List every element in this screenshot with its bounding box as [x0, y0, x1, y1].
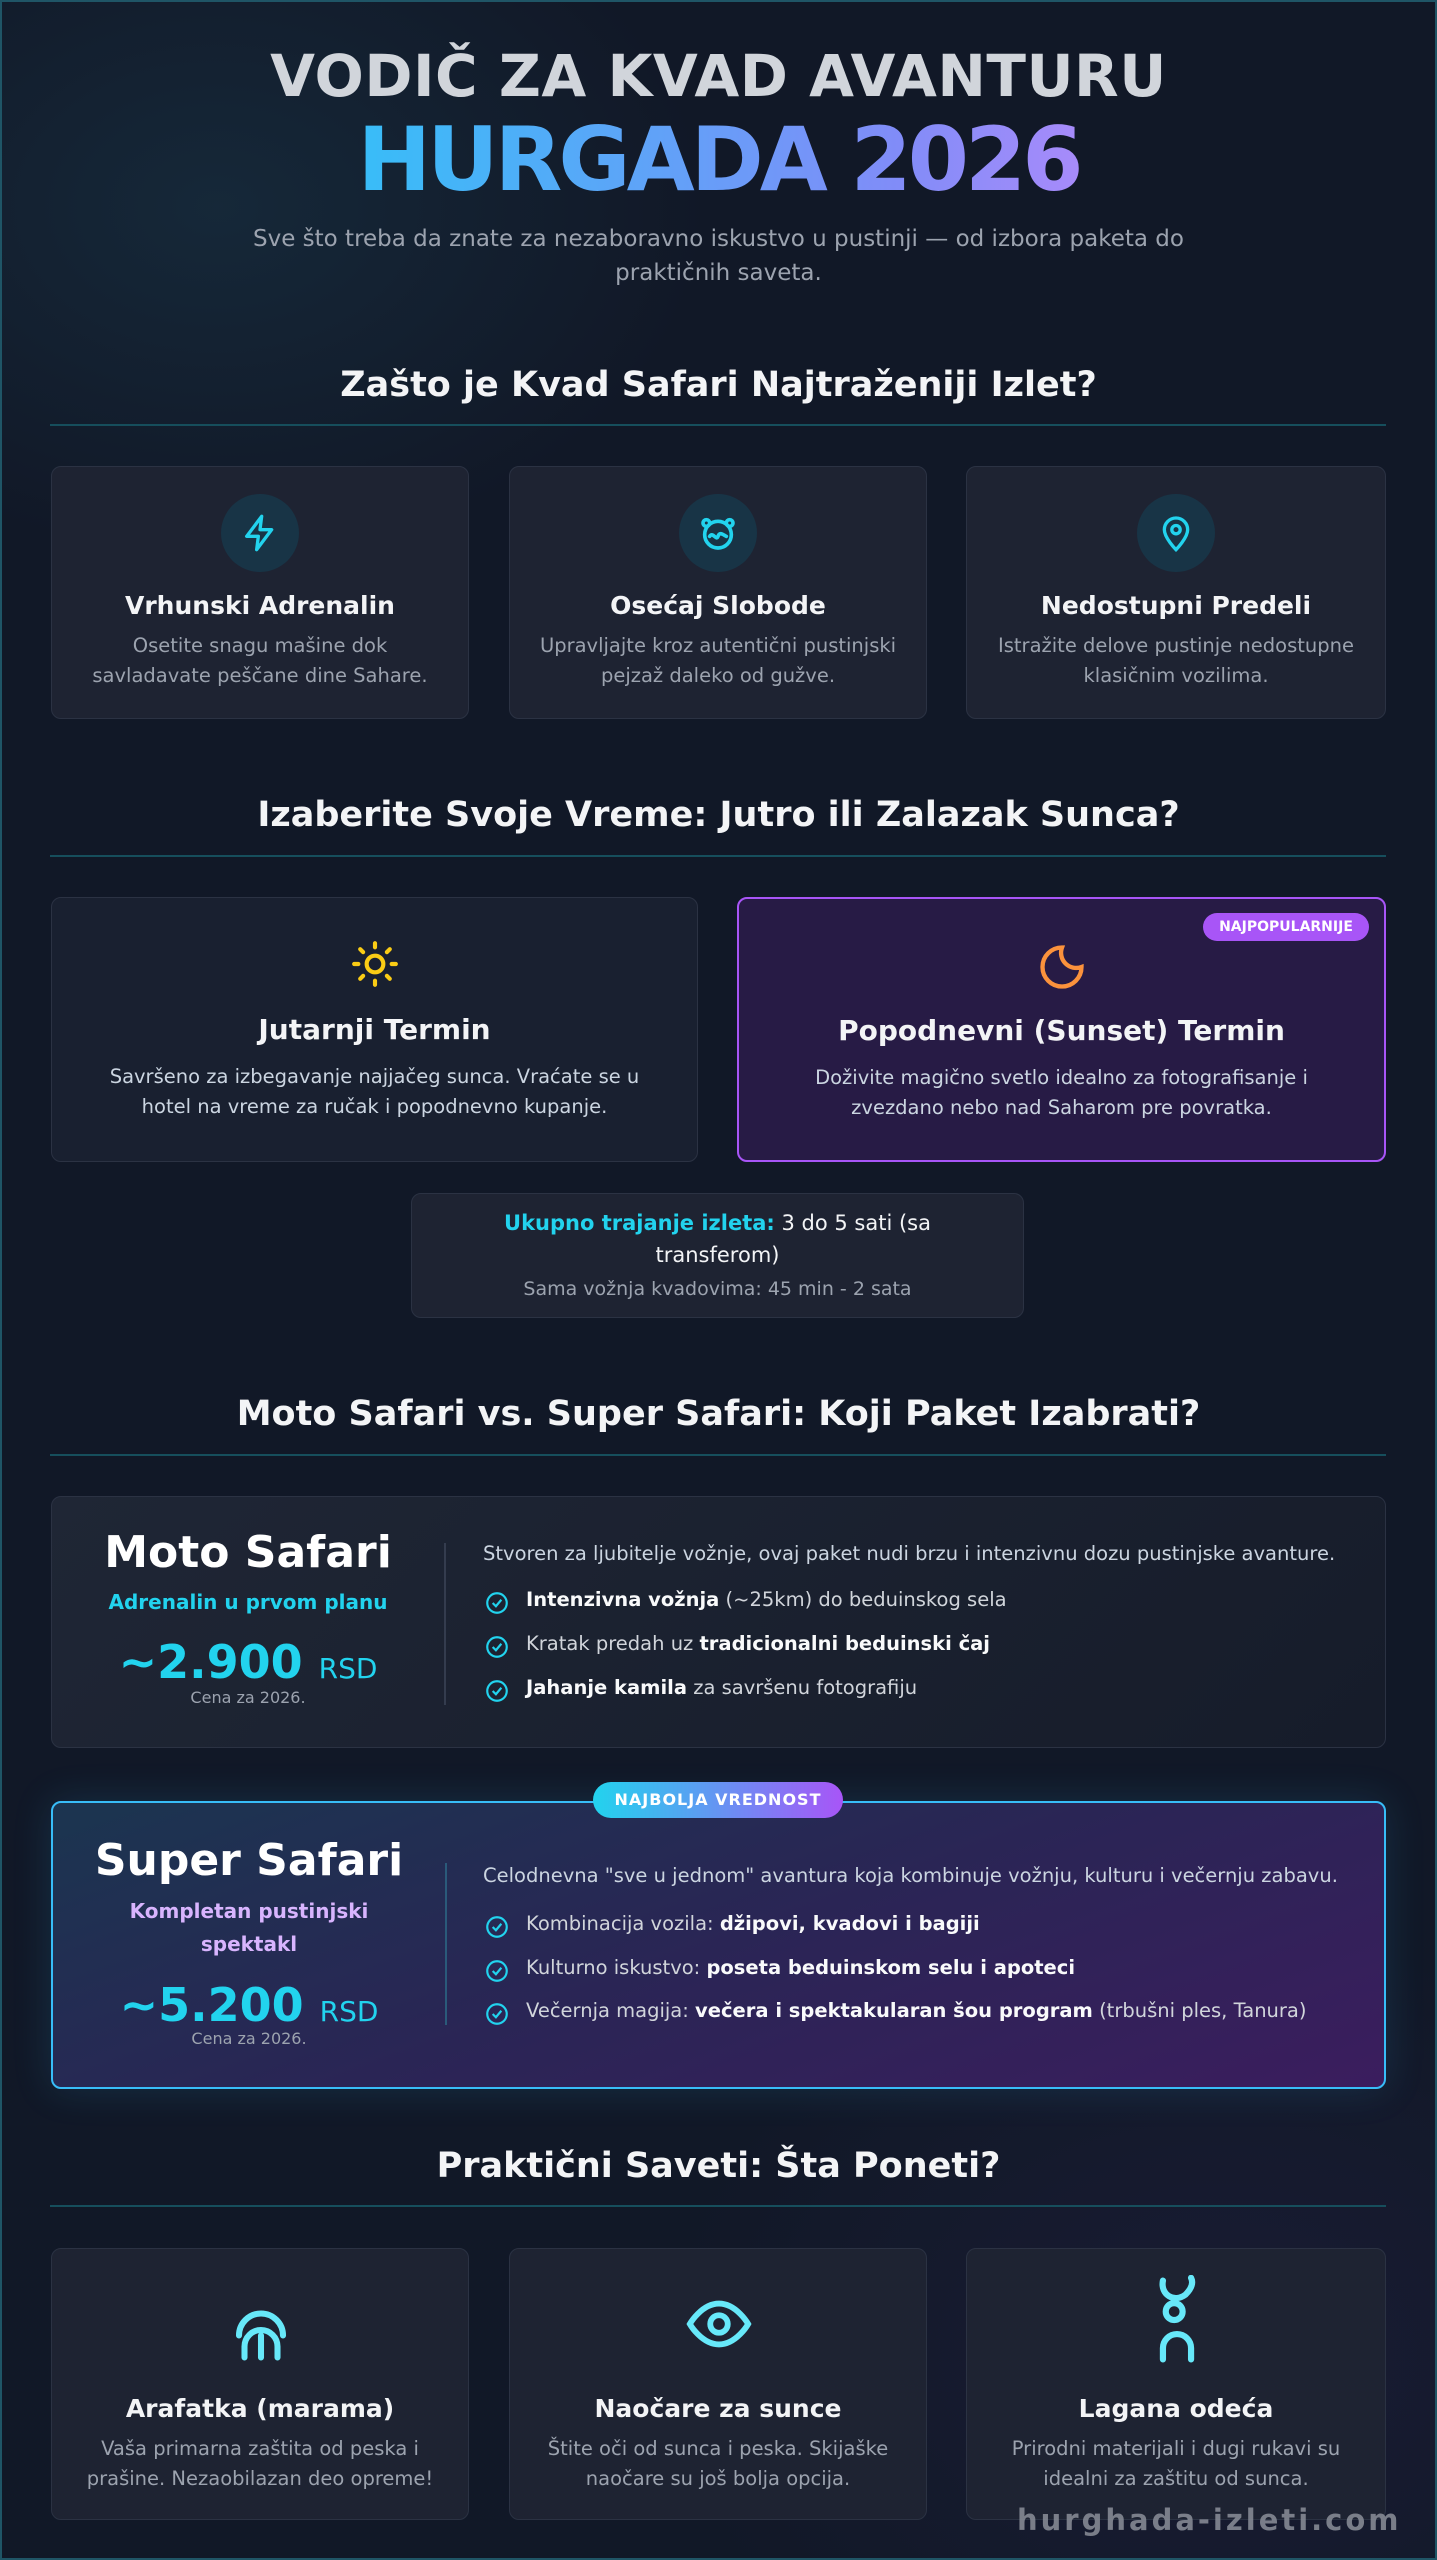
- icon: lightning: [221, 494, 299, 572]
- list: super features: Kulturno iskustvo: poseta beduinskom selu i apoteci: [526, 1956, 1075, 1979]
- panel: naocare: [509, 2248, 927, 2520]
- panel: super safari: Cena za 2026.: [191, 2029, 307, 2048]
- callout: duration: [411, 1193, 1024, 1318]
- list: moto features: [486, 1588, 1007, 1702]
- badge: najpopularnije: NAJPOPULARNIJE: [1219, 919, 1353, 935]
- text: moto description: Stvoren za ljubitelje vožnje, ovaj paket nudi brzu i intenzivnu dozu pustinjske avanture.: [483, 1542, 1335, 1565]
- panel: sloboda: Osećaj Slobode: [610, 591, 826, 620]
- badge: najbolja vrednost: [593, 1782, 843, 1818]
- list: moto features: Kratak predah uz tradicionalni beduinski čaj: [526, 1632, 990, 1655]
- panel: adrenalin: [51, 466, 469, 719]
- panel: predeli: [966, 466, 1386, 719]
- panel: sunset: Popodnevni (Sunset) Termin: [838, 1014, 1285, 1047]
- callout: duration: Sama vožnja kvadovima: 45 min - 2 sata: [523, 1278, 912, 1300]
- price: ~5.200 RSD: [120, 1978, 378, 2032]
- icon: eye: [686, 2300, 752, 2348]
- heading: packages: Moto Safari vs. Super Safari: Koji Paket Izabrati?: [237, 1394, 1200, 1434]
- panel: odeca: Lagana odeća: [1079, 2394, 1273, 2423]
- panel: moto safari: Adrenalin u prvom planu: [108, 1590, 387, 1614]
- panel: arafatka: [51, 2248, 469, 2520]
- price: ~2.900 RSD: [119, 1635, 377, 1689]
- panel: moto safari: Cena za 2026.: [190, 1688, 306, 1707]
- panel: moto safari: [51, 1496, 1386, 1748]
- panel: arafatka: Arafatka (marama): [126, 2394, 394, 2423]
- panel: predeli: Nedostupni Predeli: [1041, 591, 1311, 620]
- panel: sunset: Doživite magično svetlo idealno za fotografisanje i zvezdano nebo nad Saharom pre povratka.: [815, 1066, 1308, 1119]
- watermark: hurghada-izleti.com: [1017, 2503, 1402, 2537]
- list: super features: Kombinacija vozila: džipovi, kvadovi i bagiji: [526, 1912, 980, 1935]
- list: moto features: Jahanje kamila za savršenu fotografiju: [526, 1676, 917, 1699]
- panel: morning: [51, 897, 698, 1162]
- icon: pin: [1137, 494, 1215, 572]
- panel: morning: Jutarnji Termin: [258, 1013, 491, 1046]
- panel: super safari: [51, 1801, 1386, 2089]
- panel: naocare: Naočare za sunce: [594, 2394, 842, 2423]
- badge: najpopularnije: [1203, 913, 1369, 941]
- panel: moto safari: Moto Safari: [104, 1527, 392, 1578]
- list: moto features: Intenzivna vožnja (~25km) do beduinskog sela: [526, 1588, 1007, 1611]
- panel: odeca: [966, 2248, 1386, 2520]
- badge: najbolja vrednost: NAJBOLJA VREDNOST: [615, 1790, 821, 1809]
- heading: why: Zašto je Kvad Safari Najtraženiji Izlet?: [340, 365, 1097, 405]
- callout: duration: Ukupno trajanje izleta: 3 do 5 sati (sa transferom): [504, 1211, 931, 1267]
- icon: scarf: [236, 2310, 286, 2360]
- icon: clothing: [1159, 2275, 1196, 2362]
- panel: morning: Savršeno za izbegavanje najjačeg sunca. Vraćate se u hotel na vreme za ručak i popodnevno kupanje.: [110, 1065, 639, 1118]
- panel: naocare: Štite oči od sunca i peska. Skijaške naočare su još bolja opcija.: [548, 2437, 888, 2490]
- panel: super safari: Kompletan pustinjski spektakl: [130, 1899, 368, 1956]
- panel: sloboda: Upravljajte kroz autentični pustinjski pejzaž daleko od gužve.: [540, 634, 896, 687]
- panel: sloboda: [509, 466, 927, 719]
- panel: predeli: Istražite delove pustinje nedostupne klasičnim vozilima.: [998, 634, 1354, 687]
- text: super description: Celodnevna "sve u jednom" avantura koja kombinuje vožnju, kulturu i večernju zabavu.: [483, 1864, 1338, 1887]
- icon: moon: [1040, 945, 1084, 989]
- subtitle: Sve što treba da znate za nezaboravno iskustvo u pustinji — od izbora paketa do praktičnih saveta.: [253, 226, 1184, 286]
- panel: adrenalin: Vrhunski Adrenalin: [125, 591, 395, 620]
- panel: odeca: Prirodni materijali i dugi rukavi su idealni za zaštitu od sunca.: [1012, 2437, 1340, 2490]
- list: super features: [486, 1912, 1306, 2025]
- heading: tips: Praktični Saveti: Šta Poneti?: [437, 2146, 1000, 2186]
- panel: super safari: Super Safari: [95, 1835, 403, 1886]
- heading: time: Izaberite Svoje Vreme: Jutro ili Zalazak Sunca?: [257, 795, 1180, 835]
- panel: sunset: [737, 897, 1386, 1162]
- panel: adrenalin: Osetite snagu mašine dok savladavate peščane dine Sahare.: [92, 634, 428, 687]
- list: super features: Večernja magija: večera i spektakularan šou program (trbušni ples, Tanura): [526, 1999, 1306, 2022]
- title: VODIČ ZA KVAD AVANTURU: [270, 42, 1167, 110]
- panel: arafatka: Vaša primarna zaštita od peska i prašine. Nezaobilazan deo opreme!: [87, 2437, 433, 2490]
- icon: face: [679, 494, 757, 572]
- icon: sun: [352, 941, 398, 987]
- title highlight: HURGADA 2026: [358, 108, 1079, 211]
